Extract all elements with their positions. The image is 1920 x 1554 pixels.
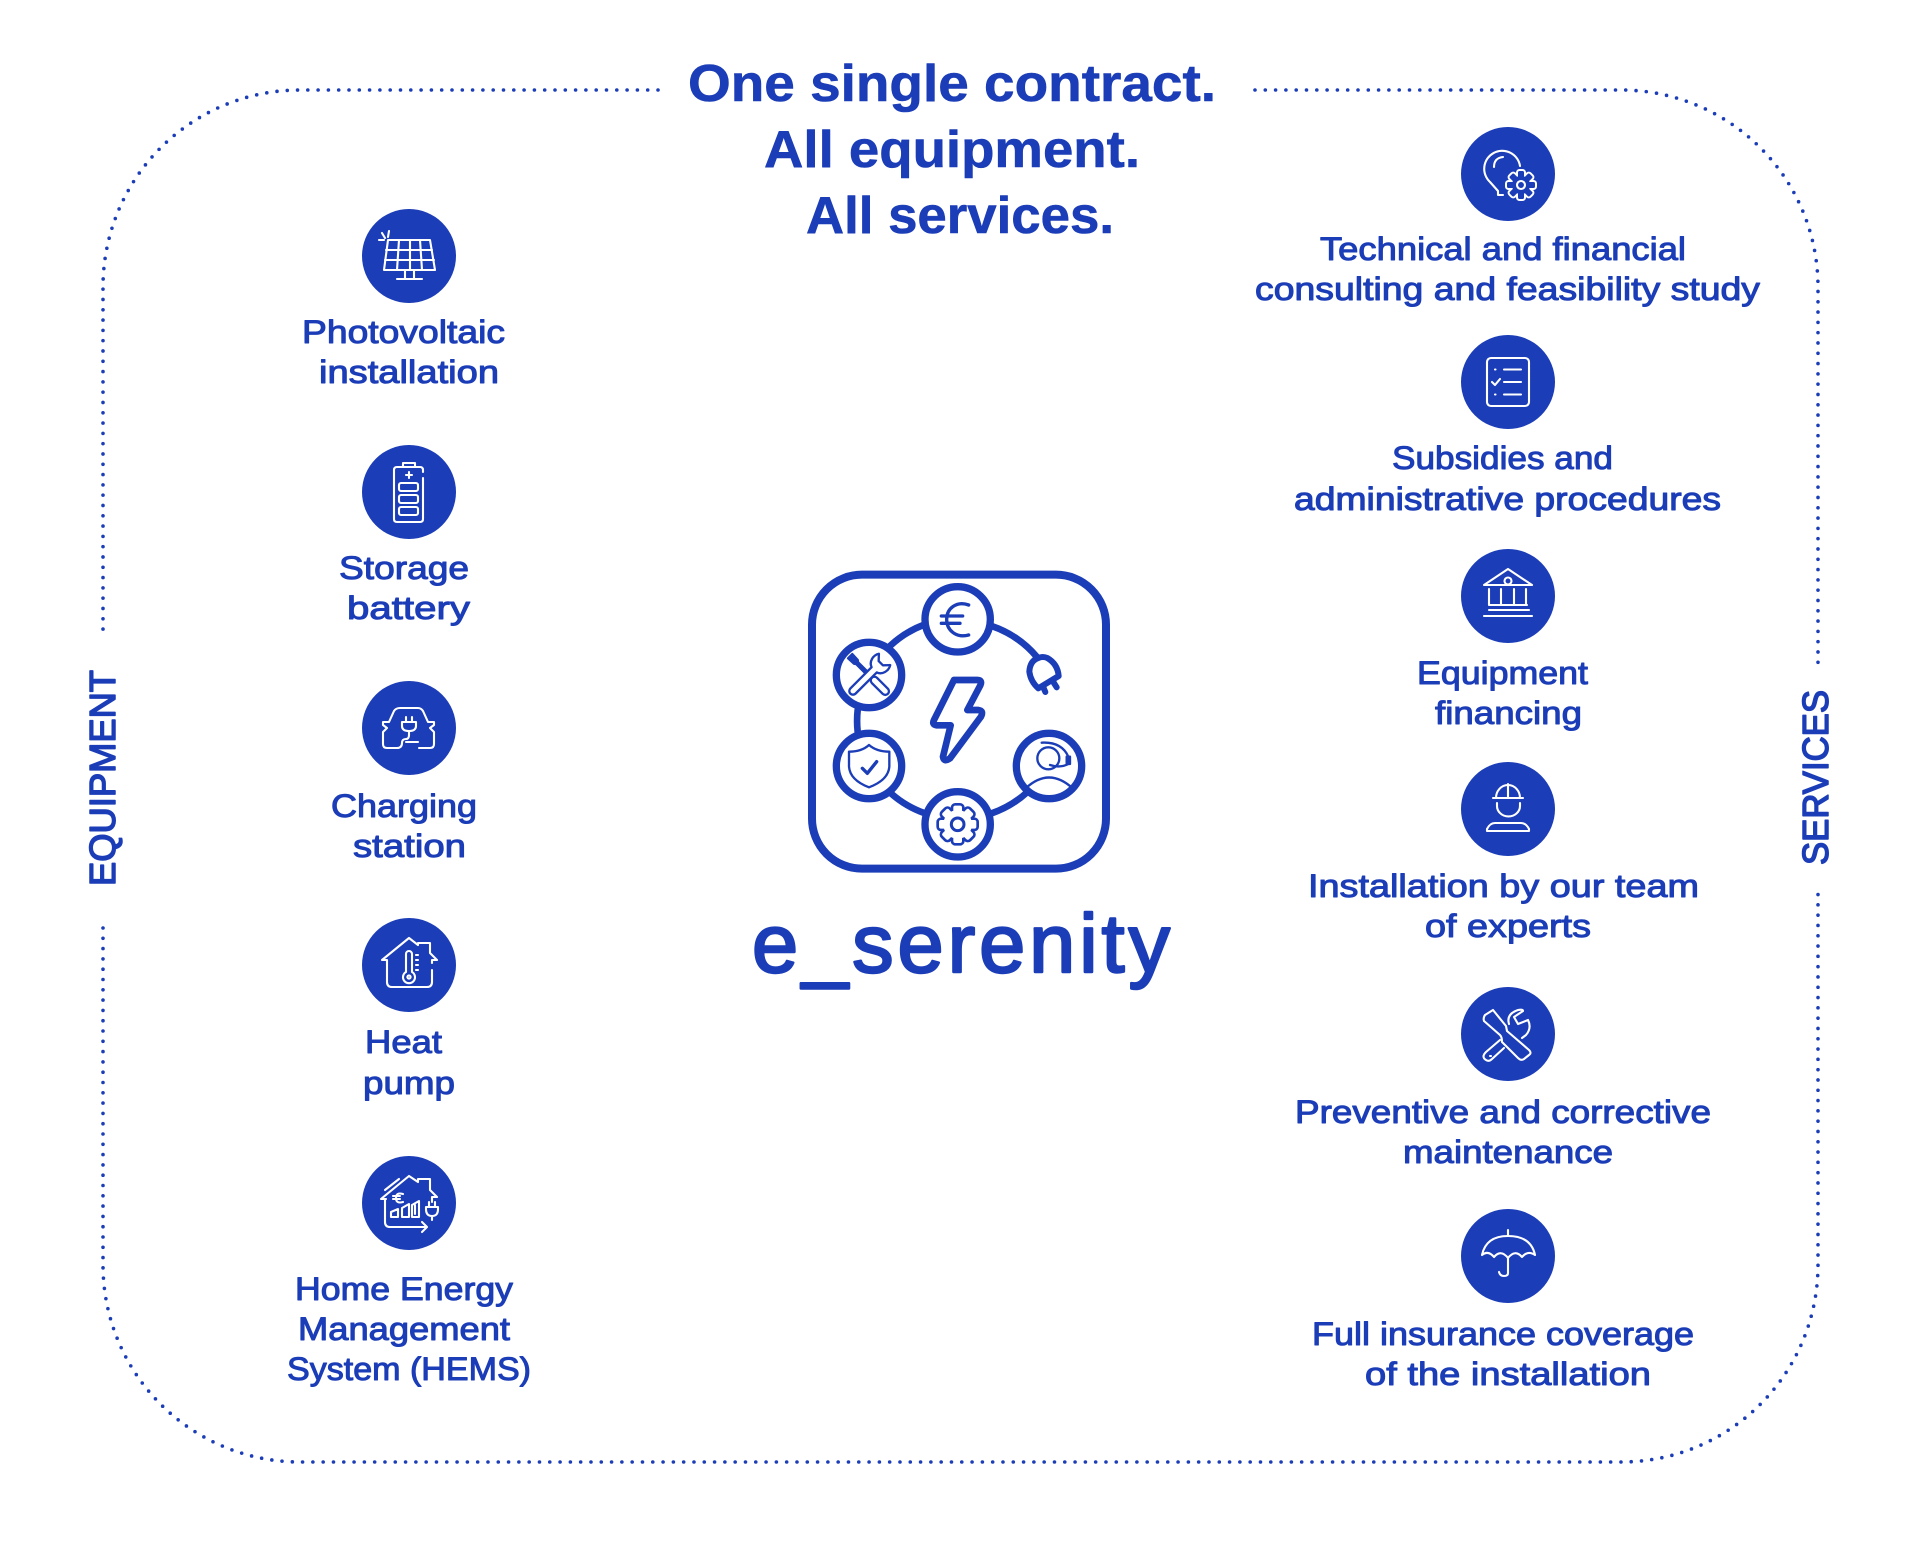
- icon: lightbulb with gear: [1461, 127, 1555, 221]
- item: photovoltaic installation: [302, 209, 505, 390]
- item: charging station: [331, 681, 477, 864]
- label: Storage: [339, 550, 469, 586]
- title: [688, 55, 1216, 245]
- label: Heat: [365, 1024, 442, 1060]
- title: One single contract.: [688, 55, 1216, 113]
- icon: support agent: [1026, 743, 1073, 788]
- icon: bank: [1461, 549, 1555, 643]
- item: heat pump: [362, 918, 456, 1101]
- icon: battery: [362, 445, 456, 539]
- label: Home Energy: [295, 1271, 513, 1307]
- item: installation by experts: [1308, 762, 1699, 944]
- item: subsidies and procedures: [1294, 335, 1721, 517]
- item: maintenance: [1295, 987, 1711, 1170]
- item: home energy management system: [287, 1156, 531, 1387]
- label: consulting and feasibility study: [1255, 271, 1760, 307]
- wordmark: e_serenity: [752, 897, 1170, 990]
- label: [1295, 1094, 1711, 1170]
- label: pump: [363, 1065, 455, 1101]
- label: [339, 550, 470, 626]
- icon: tools: [844, 653, 891, 700]
- label: Full insurance coverage: [1312, 1316, 1694, 1352]
- label: Subsidies and: [1392, 440, 1613, 476]
- icon: checklist: [1461, 335, 1555, 429]
- label: Charging: [331, 788, 477, 824]
- panel: equipment list: [287, 209, 531, 1387]
- label: [1255, 231, 1760, 307]
- label: maintenance: [1403, 1134, 1613, 1170]
- label: [1294, 440, 1721, 517]
- icon: smart energy house: [362, 1156, 456, 1250]
- dotted rounded frame: [103, 90, 1818, 1462]
- label: of the installation: [1365, 1356, 1651, 1392]
- label: Preventive and corrective: [1295, 1094, 1711, 1130]
- label: financing: [1435, 695, 1582, 731]
- icon: euro: [941, 604, 969, 636]
- label: [1312, 1316, 1694, 1392]
- icon: e_serenity logo: [812, 575, 1106, 869]
- icon: plug: [1029, 657, 1059, 692]
- label: Photovoltaic: [302, 314, 505, 350]
- icon: gear: [939, 806, 976, 843]
- label: of experts: [1425, 908, 1591, 944]
- label: [1308, 868, 1699, 944]
- label: battery: [347, 590, 470, 626]
- label: Equipment: [1417, 655, 1588, 691]
- label: station: [353, 828, 466, 864]
- icon: shield: [849, 745, 889, 787]
- label: [331, 788, 477, 864]
- side label: equipment: EQUIPMENT: [82, 670, 123, 886]
- label: installation: [319, 354, 499, 390]
- side label: services: SERVICES: [1795, 690, 1836, 865]
- label: [302, 314, 505, 390]
- icon: house with thermometer: [362, 918, 456, 1012]
- icon: solar panel: [362, 209, 456, 303]
- item: insurance: [1312, 1209, 1694, 1392]
- label: [287, 1271, 531, 1387]
- title: All services.: [806, 187, 1114, 245]
- title: All equipment.: [764, 121, 1140, 179]
- icon: umbrella: [1461, 1209, 1555, 1303]
- icon: crossed tools: [1461, 987, 1555, 1081]
- icon: lightning bolt: [933, 680, 982, 760]
- panel: central logo: [752, 575, 1170, 990]
- label: [363, 1024, 455, 1101]
- label: administrative procedures: [1294, 481, 1721, 517]
- panel: services list: [1255, 127, 1760, 1392]
- label: Management: [298, 1311, 510, 1347]
- item: equipment financing: [1417, 549, 1588, 731]
- icon: car with plug: [362, 681, 456, 775]
- item: storage battery: [339, 445, 470, 626]
- item: consulting and feasibility study: [1255, 127, 1760, 307]
- label: Installation by our team: [1308, 868, 1699, 904]
- label: Technical and financial: [1320, 231, 1686, 267]
- icon: worker with helmet: [1461, 762, 1555, 856]
- label: System (HEMS): [287, 1351, 531, 1387]
- label: [1417, 655, 1588, 731]
